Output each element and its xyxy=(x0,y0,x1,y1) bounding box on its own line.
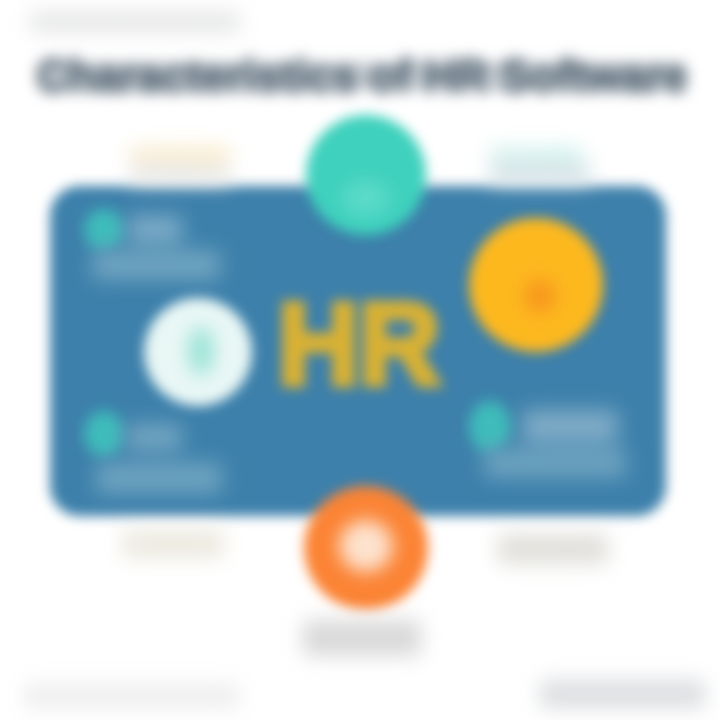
text: top left block: Payroll xyxy=(130,223,173,239)
footer right xyxy=(540,680,705,708)
text: bottom right block: Analytics xyxy=(522,419,578,435)
panel item: bottom right xyxy=(469,401,626,478)
text: bottom right block xyxy=(484,410,626,478)
text: bottom left block: Benefits xyxy=(128,430,179,446)
top left label xyxy=(130,148,230,183)
icon: bottom left teal dot xyxy=(84,411,124,457)
top right label: Onboarding xyxy=(490,149,553,163)
bottom left label: Performance xyxy=(122,539,191,553)
panel item: top left xyxy=(84,209,220,280)
icon: orange circle xyxy=(304,486,428,610)
bottom left label xyxy=(122,530,224,558)
icon: white circle xyxy=(144,298,252,406)
bottom right label: Compliance xyxy=(498,541,562,555)
top left label: Recruiting xyxy=(130,149,184,163)
icon: teal circle xyxy=(306,115,426,235)
bottom right label xyxy=(498,534,608,564)
footer left xyxy=(24,684,239,708)
footer right: hrsoftware.com xyxy=(550,687,646,703)
icon: bottom right teal dot xyxy=(469,401,511,453)
icon: top left teal dot xyxy=(84,209,124,251)
HR label: HR xyxy=(278,279,440,409)
main panel xyxy=(50,186,666,516)
title: Characteristics of HR Software xyxy=(36,49,688,102)
icon: yellow circle xyxy=(469,218,603,352)
eyebrow text: Human resources guide xyxy=(30,12,235,31)
bottom center label: Time tracking xyxy=(305,632,389,648)
panel item: bottom left xyxy=(84,411,222,494)
bottom center label xyxy=(303,620,421,656)
top right label xyxy=(490,148,590,184)
footer left: Source: HR software overview xyxy=(28,689,190,703)
